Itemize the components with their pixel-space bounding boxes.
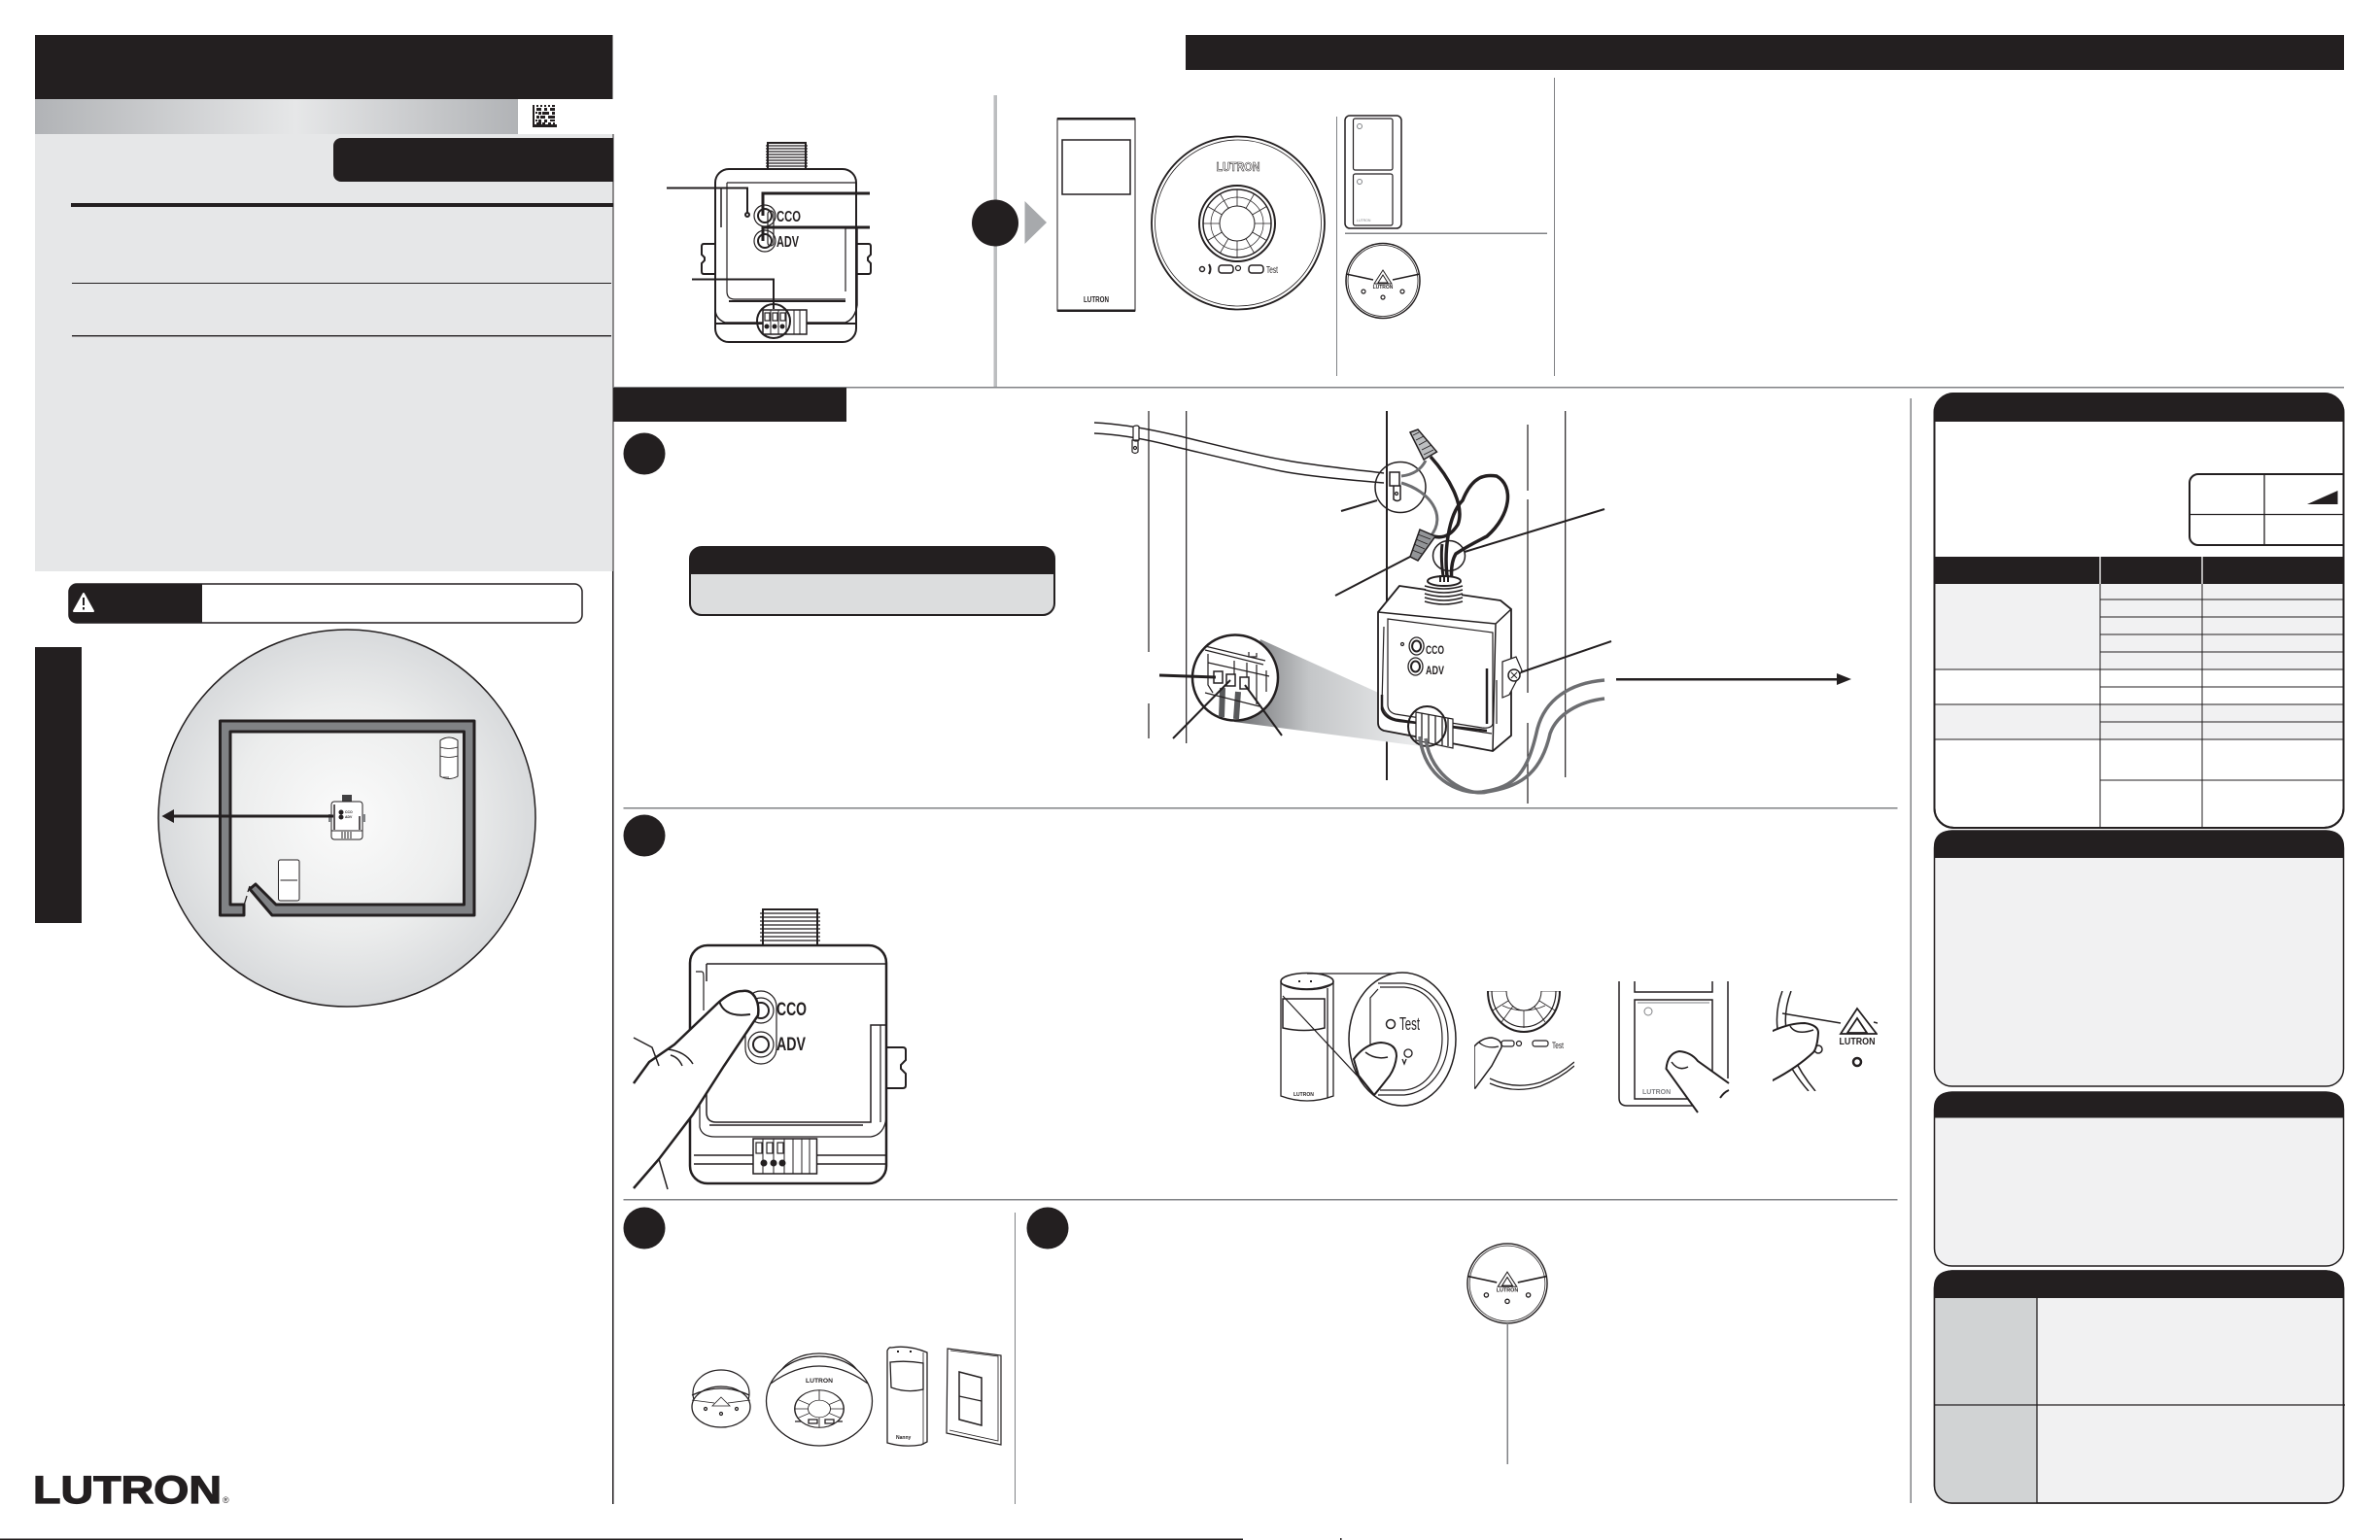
sensor controls: Test [1266, 265, 1278, 276]
diagram: module with finger press: ADV [776, 1035, 806, 1055]
icon: ceiling sensor: LUTRON [1217, 159, 1259, 174]
arrow: grey triangle [1024, 201, 1047, 244]
clip callout circle [1341, 462, 1426, 513]
module isometric: ADV [1426, 664, 1444, 677]
terminal leader lines [1159, 675, 1282, 738]
leader lines right [1335, 509, 1611, 673]
horizontal rule [624, 807, 1897, 808]
icon: module [328, 795, 365, 839]
icon: sensor angled: Nanny [896, 1435, 912, 1441]
icon: paddle switch [1345, 116, 1401, 228]
install section rule [613, 387, 2344, 389]
diagram: sensor test button detail [1281, 973, 1456, 1106]
icon: paddle switch: LUTRON [1357, 219, 1371, 222]
icon: occupancy sensor front [1057, 118, 1135, 312]
panel header [1934, 394, 2344, 422]
data matrix code [533, 105, 557, 127]
icon: sensor angled [887, 1347, 927, 1446]
module isometric: CCO [1426, 643, 1444, 657]
diagram: wiring installation [1094, 411, 1851, 804]
diagram: round remote press [1769, 991, 1878, 1091]
side tab [35, 647, 82, 923]
magnified view: Test [1399, 1014, 1420, 1034]
step 3 number circle [624, 1207, 665, 1249]
icon: round remote: LUTRON [1373, 285, 1394, 291]
icon: ceiling sensor [1152, 136, 1325, 309]
icon: warning triangle [74, 594, 93, 611]
panel: grey information block [35, 134, 612, 571]
vertical divider top [993, 95, 997, 387]
wire nut top [1410, 429, 1436, 460]
buttons [745, 213, 749, 217]
diagram: paddle switch press [1619, 981, 1729, 1112]
right column divider [1911, 398, 1912, 1503]
table rows [1935, 584, 2343, 827]
diagram: devices group [692, 1347, 1001, 1446]
section heading tab [613, 388, 846, 422]
horizontal rule [624, 1199, 1897, 1201]
diagram: ceiling sensor button detail [1474, 991, 1574, 1090]
arrow: output [1616, 673, 1851, 685]
body [690, 945, 886, 1183]
finger [1354, 1043, 1397, 1095]
zoom circle terminal [1192, 635, 1278, 721]
diagram: sensor test button detail: LUTRON [1293, 1092, 1314, 1098]
side tabs [702, 244, 715, 274]
studs [1149, 411, 1566, 804]
diagram: round remote press: LUTRON [1839, 1037, 1876, 1047]
threaded nipple [760, 909, 820, 945]
icon: round remote [1346, 243, 1420, 319]
title banner [35, 35, 612, 99]
panel: two row table [1934, 1271, 2345, 1503]
icon: module: CCO [345, 810, 353, 814]
arrow: to left [161, 809, 333, 823]
wire nut bottom [1410, 530, 1435, 561]
icon: ceiling sensor angled [766, 1353, 873, 1446]
diagram: room floor plan [158, 630, 535, 1007]
diagram: module front with callouts: CCO [776, 209, 801, 225]
logo: Lutron: ® [223, 1495, 229, 1505]
step 1 number circle [624, 433, 665, 474]
module isometric [1378, 575, 1522, 751]
magnifier cone [1234, 639, 1421, 746]
mounting screw [1502, 657, 1522, 698]
bottom edge rule [0, 1539, 1243, 1540]
threaded nipple [766, 143, 808, 169]
panel: specifications table [1934, 394, 2344, 828]
mini table [2190, 474, 2343, 545]
cable [1094, 423, 1384, 483]
vertical divider step 3 and 4 [1015, 1213, 1016, 1504]
bottom tick mark [1340, 1538, 1341, 1540]
leader lines [667, 188, 870, 309]
icon: module: ADV [345, 815, 353, 819]
finger [1666, 1051, 1729, 1112]
panel: grey notes 2 [1934, 1092, 2344, 1266]
step 4 callout line [1506, 1323, 1508, 1464]
magnified view [1349, 973, 1456, 1106]
section tab [333, 138, 612, 182]
diagram: module with finger press [634, 909, 906, 1189]
sensor controls [1199, 264, 1278, 276]
body [715, 169, 856, 342]
icon: wall switch [278, 860, 299, 901]
finger [1474, 1038, 1501, 1088]
wire circle callout [1432, 540, 1466, 571]
warning bar [69, 584, 582, 623]
diagram: ceiling sensor button detail: Test [1552, 1041, 1564, 1050]
diagram: module front with callouts: ADV [776, 234, 799, 251]
step 2 number circle [624, 814, 665, 857]
hand pressing button [634, 991, 758, 1189]
gland [1425, 575, 1463, 606]
room walls [220, 721, 474, 915]
diagram: module with finger press: CCO [776, 1000, 807, 1020]
icon: ceiling sensor angled: LUTRON [806, 1378, 833, 1385]
panel: grey notes 1 [1934, 831, 2344, 1086]
icon: occupancy sensor front: LUTRON [1084, 295, 1109, 304]
gradient subtitle band [35, 99, 518, 134]
diagram: paddle switch press: LUTRON [1642, 1089, 1671, 1096]
step 4 number circle [1026, 1207, 1069, 1249]
buttons [745, 991, 776, 1064]
icon: round remote angled [692, 1370, 750, 1427]
icon: occupancy sensor [440, 737, 458, 779]
terminal detail [1408, 706, 1453, 748]
logo: Lutron: LUTRON [33, 1469, 222, 1512]
wires [1401, 457, 1507, 583]
icon: wall plate angled [947, 1349, 1001, 1445]
left column vertical divider [612, 134, 614, 1504]
right tab [886, 1047, 906, 1088]
top right heading bar [1186, 35, 2344, 70]
thin dividers device column [1336, 78, 1555, 376]
output wires [1420, 680, 1604, 793]
callout: step 1 note [690, 547, 1054, 615]
finger [1769, 1023, 1818, 1082]
terminal block [757, 304, 807, 338]
terminal block [753, 1139, 816, 1174]
icon: step 4 round remote: LUTRON [1497, 1288, 1518, 1294]
table header row [1935, 557, 2343, 584]
diagram: module front with callouts [667, 143, 871, 342]
icon: step 4 round remote [1467, 1244, 1547, 1323]
step number circle [972, 200, 1018, 247]
